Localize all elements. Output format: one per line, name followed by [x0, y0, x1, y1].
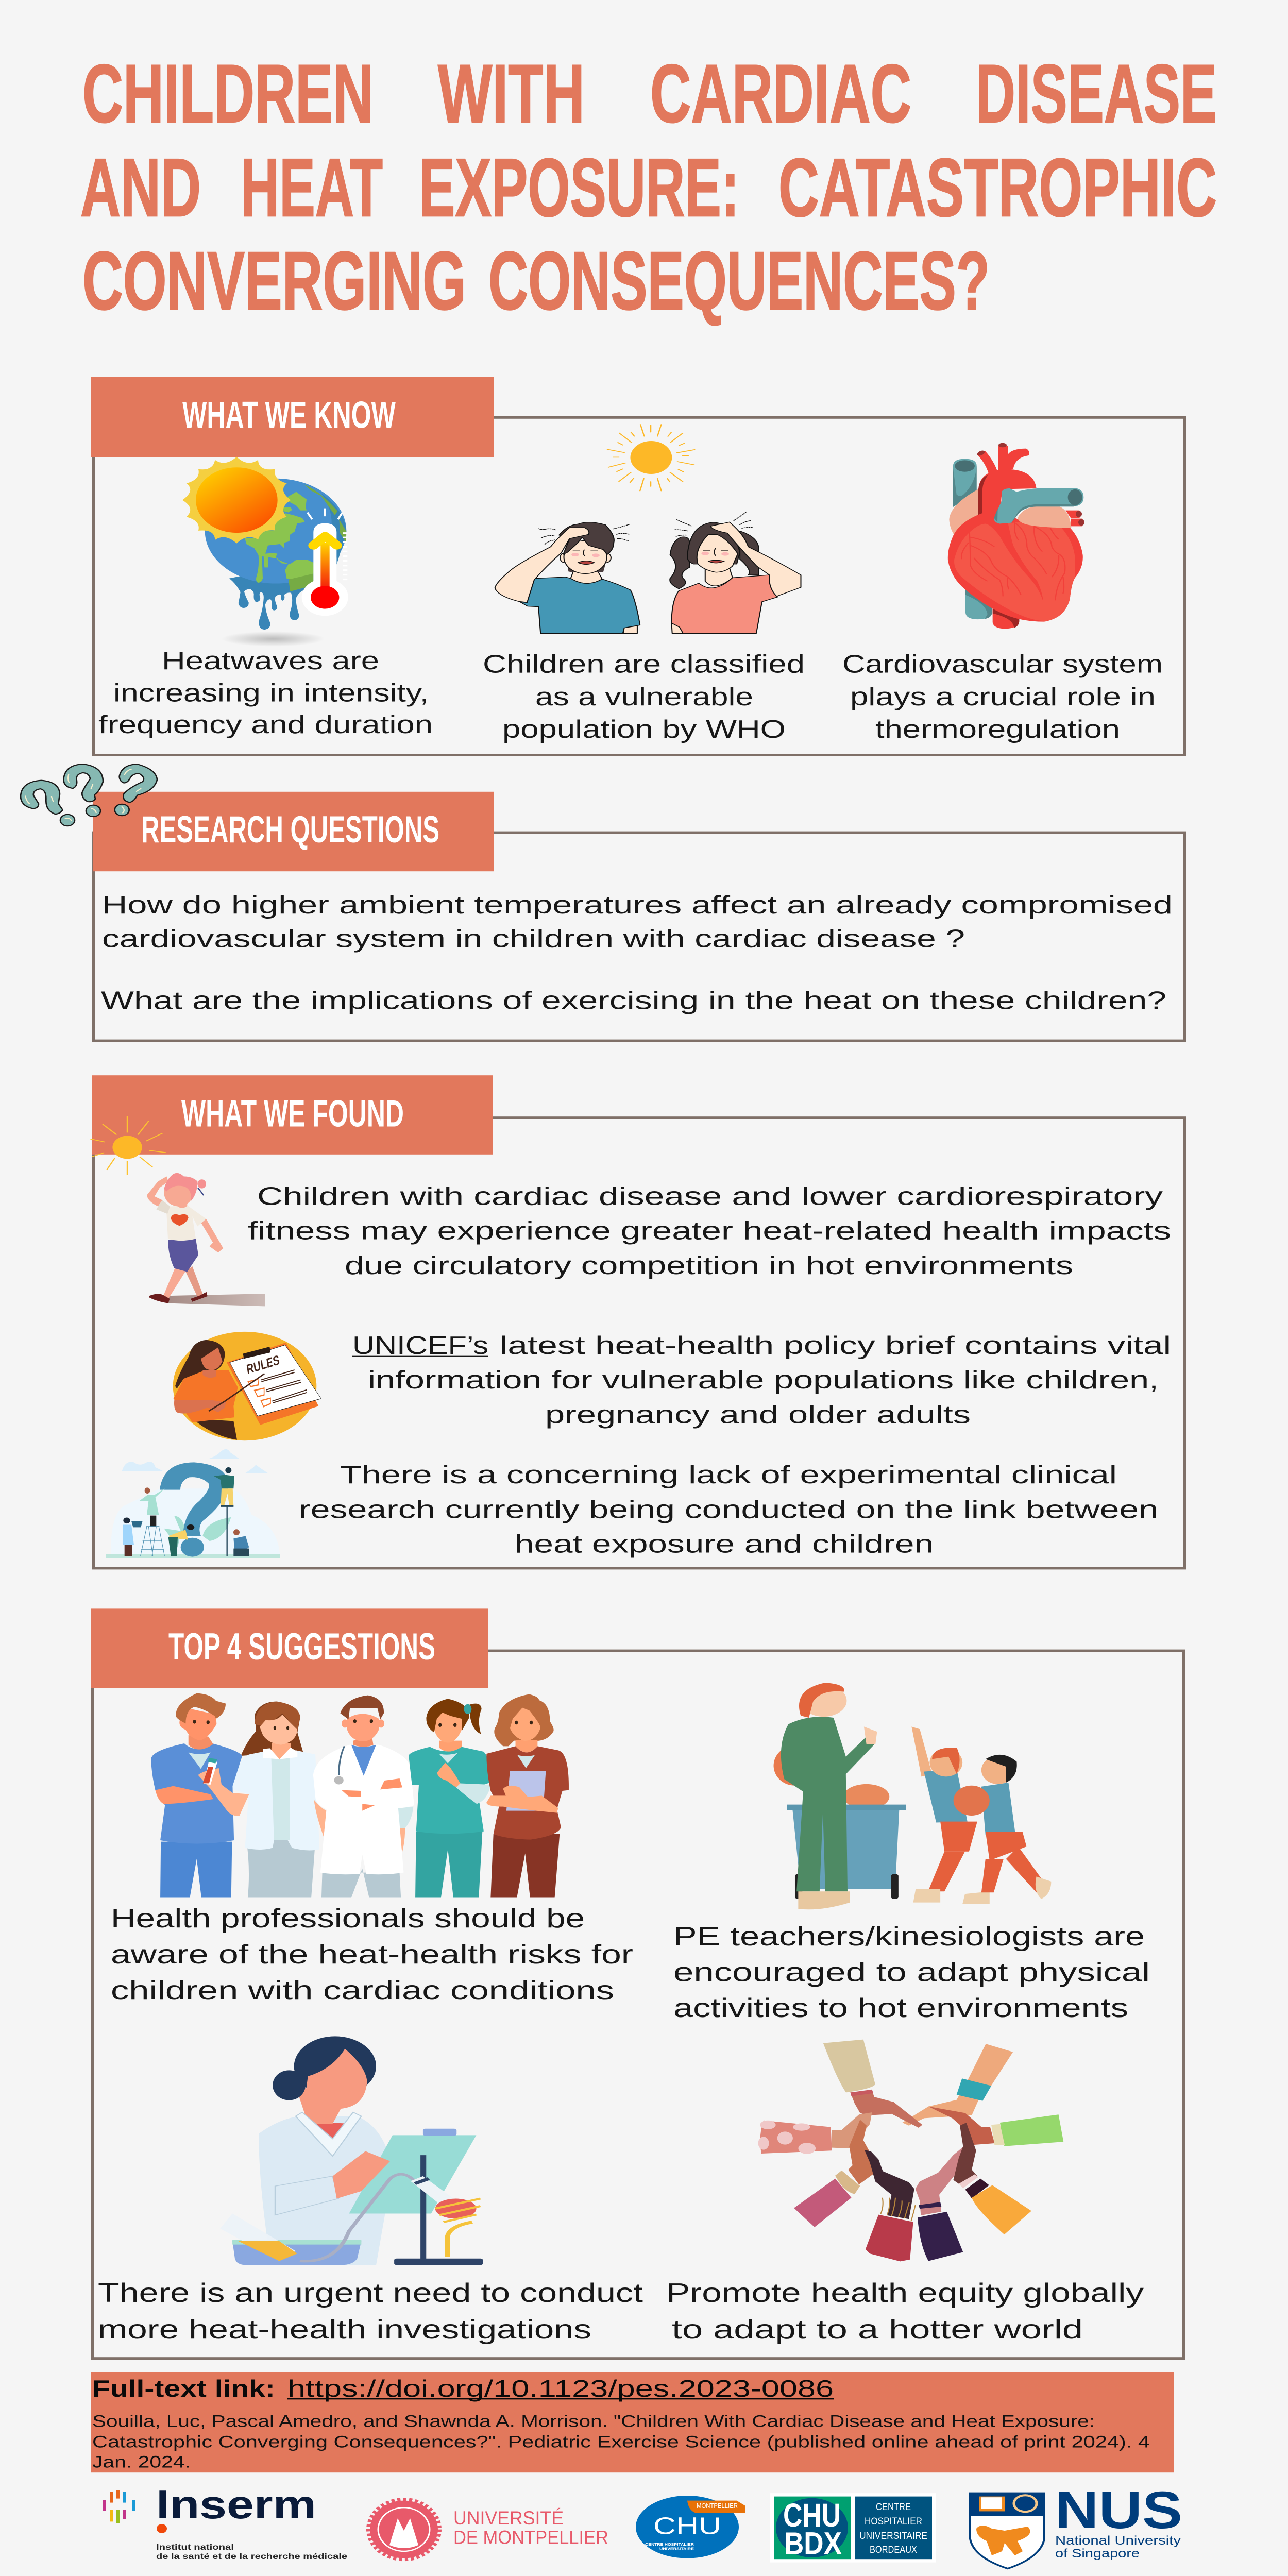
text: finding one: due circulatory competition in hot environments	[345, 1251, 1073, 1279]
text: suggestion health professionals: aware of the heat-health risks for	[111, 1940, 633, 1970]
text: vulnerable children: Children are classified	[483, 650, 805, 678]
heading: top 4 suggestions: TOP 4 SUGGESTIONS	[168, 1625, 435, 1668]
logo: CHU Montpellier	[636, 2496, 745, 2558]
full-text link: Full-text link:	[92, 2375, 275, 2402]
logo: Inserm	[104, 2482, 347, 2561]
text: suggestion equity	[666, 2278, 1144, 2345]
text: vulnerable children: population by WHO	[502, 715, 786, 743]
text: finding three: research currently being conducted on the link between	[299, 1495, 1158, 1523]
logo: NUS	[969, 2480, 1182, 2569]
text: research question one	[102, 890, 1173, 953]
text: suggestion PE teachers: PE teachers/kinesiologists are	[673, 1922, 1145, 1951]
text: suggestion research: more heat-health investigations	[98, 2315, 591, 2345]
reference text: Catastrophic Converging Consequences?". Pediatric Exercise Science (published online ahead of print 2024). 4	[92, 2432, 1150, 2451]
icon: hands forming a heart	[758, 2040, 1063, 2261]
logo: Inserm: Inserm	[156, 2482, 316, 2527]
text: cardiovascular system: Cardiovascular system	[842, 650, 1163, 678]
heading: what we know: WHAT WE KNOW	[182, 394, 396, 436]
panel: what we found	[90, 1075, 1184, 1568]
logo: NUS: of Singapore	[1055, 2546, 1140, 2560]
text: research question two: What are the implications of exercising in the heat on these children?	[101, 986, 1166, 1014]
text: finding three	[299, 1460, 1158, 1558]
icon: hot boy	[495, 522, 640, 633]
icon: hot girl	[670, 512, 801, 633]
text: finding two: latest heat-health policy brief contains vital	[500, 1331, 1171, 1360]
logo: CHU Bordeaux: BDX	[784, 2526, 842, 2561]
logo: Université de Montpellier	[370, 2501, 608, 2558]
logo: Université de Montpellier: UNIVERSITÉ	[453, 2507, 564, 2529]
title: EXPOSURE:	[419, 142, 739, 234]
text: suggestion research: There is an urgent need to conduct	[98, 2278, 643, 2308]
logo: CHU Bordeaux: BORDEAUX	[870, 2544, 917, 2555]
logo: Université de Montpellier: DE MONTPELLIER	[453, 2527, 608, 2548]
text: suggestion PE teachers	[673, 1922, 1150, 2023]
heading: what we found: WHAT WE FOUND	[181, 1092, 404, 1134]
text: cardiovascular system: plays a crucial role in	[850, 682, 1156, 710]
text: finding one: Children with cardiac disease and lower cardiorespiratory	[257, 1181, 1163, 1210]
logo: CHU Montpellier: UNIVERSITAIRE	[659, 2547, 694, 2551]
icon: scientist with clipboard and lab equipment	[220, 2036, 483, 2265]
text: finding three: heat exposure and children	[515, 1530, 934, 1558]
panel: top 4 suggestions	[91, 1608, 1183, 2359]
text: suggestion health professionals: Health professionals should be	[111, 1904, 585, 1933]
logo: CHU Bordeaux: UNIVERSITAIRE	[859, 2530, 927, 2541]
text: cardiovascular system	[842, 650, 1163, 743]
panel: what we know	[91, 377, 1184, 755]
text: finding one	[248, 1181, 1171, 1279]
title: CONVERGING	[82, 235, 466, 327]
icon: small sun	[90, 1116, 166, 1175]
icon: health professionals	[151, 1693, 569, 1897]
logo: CHU Bordeaux: CENTRE	[876, 2501, 911, 2512]
text: suggestion PE teachers: encouraged to adapt physical	[673, 1958, 1150, 1987]
logo: CHU Montpellier: CENTRE HOSPITALIER	[645, 2543, 694, 2547]
icon: PE teacher with children and balls	[774, 1683, 1051, 1909]
reference text	[92, 2412, 1150, 2471]
title	[80, 48, 1217, 327]
text: finding three: There is a concerning lack of experimental clinical	[340, 1460, 1117, 1489]
text: suggestion health professionals: children with cardiac conditions	[111, 1976, 614, 2005]
text: finding two	[352, 1331, 1171, 1429]
logo: CHU Bordeaux: HOSPITALIER	[865, 2515, 922, 2527]
text: vulnerable children: as a vulnerable	[535, 682, 753, 710]
logo: NUS: National University	[1055, 2533, 1181, 2548]
title: CARDIAC	[650, 48, 911, 140]
icon: woman with rules clipboard: RULES	[246, 1352, 280, 1377]
title: WITH	[438, 48, 585, 140]
text: cardiovascular system: thermoregulation	[875, 715, 1120, 743]
text: heatwaves: Heatwaves are	[162, 646, 379, 675]
icon: woman with rules clipboard	[173, 1332, 321, 1440]
logo: Inserm: Institut national	[156, 2543, 234, 2551]
icon: research question mark with people	[106, 1449, 280, 1558]
logo: CHU Montpellier: MONTPELLIER	[697, 2502, 738, 2510]
heading: research questions: RESEARCH QUESTIONS	[141, 808, 439, 851]
icon: overheated child walking	[147, 1173, 265, 1306]
logo: CHU Bordeaux	[770, 2493, 936, 2563]
text: suggestion equity: to adapt to a hotter world	[672, 2315, 1083, 2345]
text: suggestion research	[98, 2278, 643, 2345]
text: vulnerable children	[483, 650, 805, 743]
full-text link	[92, 2375, 834, 2402]
title: AND	[80, 142, 201, 234]
text: finding two: information for vulnerable populations like children,	[368, 1365, 1159, 1394]
logo: NUS: NUS	[1055, 2480, 1182, 2539]
text: heatwaves: increasing in intensity,	[113, 679, 429, 707]
icon: melting globe with sun and thermometer	[182, 457, 348, 647]
full-text link: https://doi.org/10.1123/pes.2023-0086	[287, 2375, 834, 2402]
text: suggestion health professionals	[111, 1904, 633, 2005]
title: HEAT	[241, 142, 383, 234]
title: CHILDREN	[82, 48, 374, 140]
icon: sun above children	[607, 425, 694, 491]
reference text: Jan. 2024.	[92, 2452, 191, 2471]
text: finding two: pregnancy and older adults	[545, 1400, 971, 1429]
text: heatwaves	[98, 646, 433, 739]
icon: question marks	[21, 764, 157, 826]
logo: CHU Montpellier: CHU	[653, 2513, 721, 2539]
citation block	[91, 2372, 1174, 2472]
text: heatwaves: frequency and duration	[98, 710, 433, 739]
text: finding two: UNICEF’s	[352, 1331, 488, 1360]
panel: research questions	[21, 764, 1184, 1041]
text: research question one: cardiovascular system in children with cardiac disease ?	[102, 924, 965, 953]
logo: CHU Bordeaux: CHU	[783, 2497, 841, 2534]
text: suggestion PE teachers: activities to hot environments	[673, 1993, 1128, 2023]
icon: anatomical heart	[948, 443, 1084, 629]
logo: Inserm: de la santé et de la recherche médicale	[156, 2552, 347, 2561]
text: suggestion equity: Promote health equity globally	[666, 2278, 1144, 2308]
text: research question one: How do higher ambient temperatures affect an already compromised	[102, 890, 1173, 919]
text: finding one: fitness may experience greater heat-related health impacts	[248, 1216, 1171, 1245]
reference text: Souilla, Luc, Pascal Amedro, and Shawnda A. Morrison. "Children With Cardiac Disease and Heat Exposure:	[92, 2412, 1095, 2430]
